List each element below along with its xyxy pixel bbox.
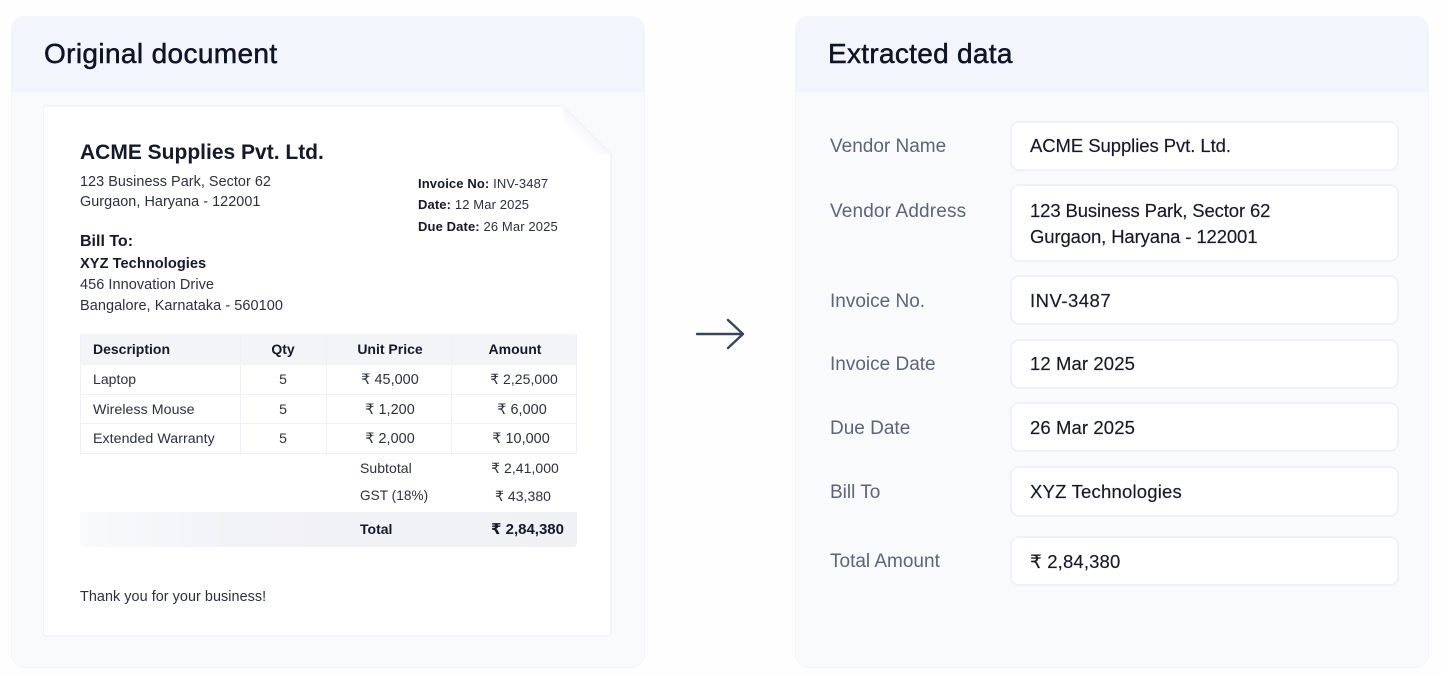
panel: extracted data <box>795 16 1429 668</box>
bill to block <box>80 256 283 314</box>
table text: Total <box>360 521 392 537</box>
table text: Subtotal <box>360 460 412 476</box>
arrow <box>696 318 744 350</box>
field label: invoice date: Invoice Date <box>830 354 936 375</box>
vendor name value: ACME Supplies Pvt. Ltd. <box>1030 135 1231 156</box>
table text: Amount <box>489 341 541 357</box>
due date value: 26 Mar 2025 <box>1030 417 1135 438</box>
field label: total amount: Total Amount <box>830 551 940 572</box>
table text: Laptop <box>93 371 136 387</box>
table text: 5 <box>279 401 287 417</box>
invoice no value <box>1010 275 1399 325</box>
bill to block: 456 Innovation Drive <box>80 277 214 293</box>
vendor address value: Gurgaon, Haryana - 122001 <box>1030 226 1257 247</box>
bill to heading: Bill To: <box>80 233 133 250</box>
table text: 5 <box>279 430 287 446</box>
table text: Extended Warranty <box>93 431 215 447</box>
vendor name value <box>1010 121 1399 171</box>
table text: ₹ 1,200 <box>365 402 415 418</box>
vendor address <box>80 174 271 210</box>
vendor address: 123 Business Park, Sector 62 <box>80 174 271 190</box>
vendor address value: 123 Business Park, Sector 62 <box>1030 200 1270 221</box>
invoice metadata: Date: 12 Mar 2025 <box>418 197 529 212</box>
invoice table <box>80 334 577 547</box>
thank you note: Thank you for your business! <box>80 589 266 605</box>
invoice no value: INV-3487 <box>1030 290 1111 311</box>
invoice date value: 12 Mar 2025 <box>1030 353 1135 374</box>
table text: ₹ 45,000 <box>361 372 419 388</box>
table text: ₹ 43,380 <box>495 488 551 504</box>
field label: vendor address: Vendor Address <box>830 201 966 222</box>
table text: 5 <box>279 371 287 387</box>
total row band <box>80 512 577 547</box>
panel header: original document <box>12 17 644 92</box>
table text: ₹ 2,41,000 <box>491 460 559 476</box>
heading: original document: Original document <box>44 38 278 69</box>
bill to value: XYZ Technologies <box>1030 481 1182 502</box>
bill to value <box>1010 466 1399 517</box>
field label: vendor name: Vendor Name <box>830 136 946 157</box>
panel: original document <box>11 16 645 668</box>
invoice metadata <box>418 176 558 234</box>
total amount value: ₹ 2,84,380 <box>1030 551 1120 572</box>
table text: Qty <box>271 341 295 357</box>
heading: extracted data: Extracted data <box>828 38 1013 69</box>
vendor address value <box>1010 184 1399 262</box>
table text: Description <box>93 341 170 357</box>
vendor address: Gurgaon, Haryana - 122001 <box>80 194 260 210</box>
invoice metadata: Invoice No: INV-3487 <box>418 176 548 191</box>
table text: Unit Price <box>357 341 423 357</box>
invoice vendor name: ACME Supplies Pvt. Ltd. <box>80 141 324 164</box>
panel header: extracted data <box>796 17 1428 92</box>
invoice metadata: Due Date: 26 Mar 2025 <box>418 219 558 234</box>
field label: invoice no: Invoice No. <box>830 291 925 312</box>
invoice page <box>43 106 612 636</box>
table text: ₹ 10,000 <box>492 431 550 447</box>
table text: ₹ 2,25,000 <box>490 371 558 387</box>
table text: Wireless Mouse <box>93 402 195 418</box>
invoice date value <box>1010 339 1399 389</box>
table text: ₹ 2,000 <box>365 431 415 447</box>
field label: due date: Due Date <box>830 418 910 439</box>
bill to block: Bangalore, Karnataka - 560100 <box>80 298 283 314</box>
due date value <box>1010 402 1399 452</box>
table text: ₹ 2,84,380 <box>491 521 564 538</box>
bill to block: XYZ Technologies <box>80 256 206 272</box>
table text: GST (18%) <box>360 488 428 503</box>
total amount value <box>1010 536 1399 586</box>
table header row <box>80 334 577 364</box>
table text: ₹ 6,000 <box>497 402 547 418</box>
field label: bill to: Bill To <box>830 482 880 503</box>
